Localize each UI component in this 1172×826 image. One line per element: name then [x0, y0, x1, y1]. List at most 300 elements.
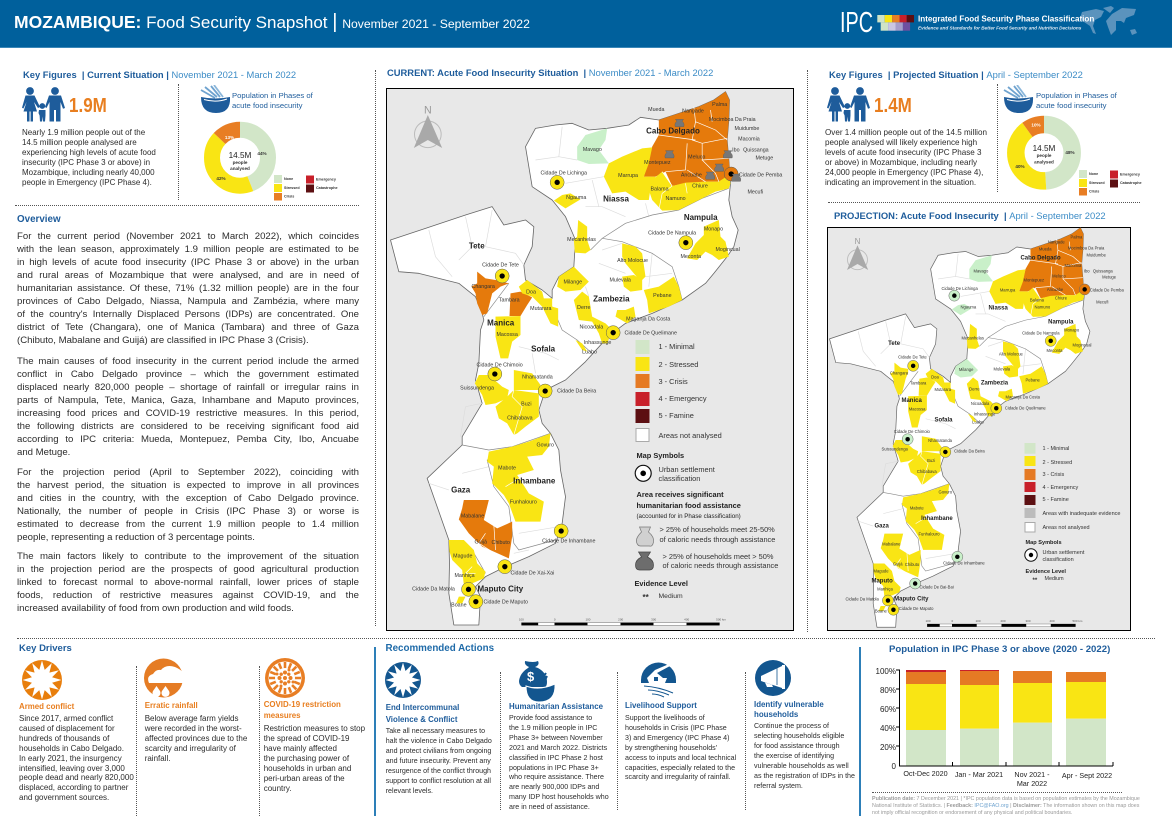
- country outline: [390, 92, 738, 625]
- overview text: the harvest period, the situation is expected to improve in all provinces: [17, 480, 359, 491]
- text block: Support the livelihoods of: [625, 714, 705, 722]
- map legend: Map Symbols: [1025, 540, 1061, 546]
- district labels: Cidade De Quelimane: [624, 331, 676, 337]
- icon: bowl: [1004, 85, 1034, 113]
- overview text: increased availability of food from own production and wild foods.: [17, 603, 294, 614]
- icon: humanitarian assistance: $: [527, 669, 535, 684]
- labels north: Nangade: [1047, 239, 1065, 244]
- bar: Apr-Sept 2022: [1066, 672, 1106, 766]
- overview text: conflict in Cabo Delgado province – which the government estimated: [17, 369, 359, 380]
- district labels: Cidade De Nampula: [648, 230, 696, 236]
- text block: intensified, leaving over 3,000: [19, 764, 125, 773]
- province lines: [883, 300, 1082, 571]
- title: MOZAMBIQUE: Food Security Snapshot | November 2021 - September 2022: [14, 11, 530, 33]
- scale bar: 100: [518, 618, 524, 622]
- labels north: Changara: [889, 370, 908, 375]
- text block: who require assistance. There: [509, 773, 604, 781]
- district lines: [858, 254, 1040, 559]
- district labels: Manhiça: [454, 573, 474, 579]
- labels south: Cidade De Chimoio: [893, 429, 930, 434]
- north arrow: [846, 237, 868, 270]
- province labels: Gaza: [451, 486, 470, 495]
- text block: Below average farm yields: [145, 714, 239, 723]
- donut chart: 44%: [257, 151, 267, 156]
- map legend: [1024, 443, 1120, 584]
- overview text: district of Tete (Changara), one of Manica (Tambara) and three of Gaza: [17, 322, 359, 333]
- district labels: Cidade De Maputo: [483, 599, 527, 605]
- phase 1 area: [577, 128, 608, 164]
- scale bar: 100: [975, 619, 980, 623]
- footer note: Publication date: 7 December 2021 | *IPC population data is based on population estimates by the Mozambique: [872, 796, 1140, 802]
- north arrow: N: [854, 237, 860, 246]
- map legend: humanitarian food assistance: [636, 501, 740, 510]
- chart heading: Population in IPC Phase 3 or above (2020 - 2022): [889, 644, 1110, 655]
- map legend: Medium: [658, 593, 683, 600]
- labels north: Doa: [931, 374, 939, 379]
- text block: Nearly 1.9 million people out of the: [22, 128, 145, 137]
- text block: people in Emergency (IPC Phase 4).: [22, 178, 152, 187]
- labels north: Derre: [969, 386, 980, 391]
- scale bar: 0: [553, 618, 555, 622]
- labels south: Maputo City: [894, 597, 929, 603]
- labels north: Cidade De Tete: [898, 355, 927, 360]
- labels south: Buzi: [927, 458, 935, 463]
- footer note: National Institute of Statistics. | Feedback: IPC@FAO.org | Disclaimer: The information shown on this map does: [872, 803, 1139, 809]
- text block: capacities, especially related to the: [625, 764, 735, 772]
- text block: classified in IPC Phase 2 host: [509, 754, 603, 762]
- sub heading: Population in Phases of: [232, 91, 313, 100]
- bar: Oct-Dec 2020: [906, 670, 946, 766]
- y axis labels: 0: [892, 762, 897, 771]
- province labels: Inhambane: [513, 476, 555, 485]
- text block: [22, 128, 156, 187]
- phase 2 areas: [873, 269, 1084, 611]
- text block: [754, 722, 855, 792]
- donut legend: [1079, 170, 1142, 196]
- labels south: Cidade Da Matola: [845, 597, 879, 602]
- footer note: [872, 796, 1140, 817]
- labels south: Inhambane: [921, 516, 953, 522]
- text block: Over 1.4 million people out of the 14.5 million: [825, 128, 987, 137]
- donut legend: Crisis: [1089, 190, 1099, 194]
- white district lines in coloured areas: [465, 107, 728, 573]
- map legend: Areas with inadequate evidence: [1042, 511, 1120, 517]
- title: households: [754, 710, 798, 719]
- map legend: Evidence Level: [634, 579, 687, 588]
- map legend: Evidence Level: [1025, 569, 1066, 575]
- text block: many IDP host households who: [509, 793, 609, 801]
- bar: Jan-Mar 2021: [960, 670, 999, 766]
- district labels: Ngauma: [566, 195, 586, 201]
- text block: [19, 714, 134, 802]
- labels north: Montepuez: [1023, 278, 1044, 283]
- text block: have mainly affected: [264, 744, 337, 753]
- district labels: Mutarara: [530, 306, 551, 312]
- overview text: provinces of Cabo Delgado, Niassa, Nampula and Zambézia, where many: [17, 296, 359, 307]
- title: [754, 700, 824, 720]
- bar chart: [860, 662, 1130, 792]
- text block: 14.5 million people analysed are: [22, 138, 137, 147]
- district labels: Macomia: [738, 137, 759, 143]
- heading: Key Figures | Current Situation | November 2021 - March 2022: [23, 69, 296, 80]
- overview text: Nationally, the number of people in Crisis (IPC Phase 3) or worse is: [17, 506, 359, 517]
- labels south: Suissundenga: [881, 446, 908, 451]
- map: projection: [827, 227, 1131, 631]
- donut chart: 13%: [225, 135, 234, 140]
- text block: vulnerable households as well: [754, 762, 849, 770]
- overview text: and rural areas of Mozambique that were analysed, and are in need of: [17, 270, 359, 281]
- donut chart: people: [1037, 153, 1052, 158]
- labels north: Niassa: [988, 305, 1008, 311]
- labels north: Muidumbe: [1086, 252, 1106, 257]
- text block: halt the violence in Cabo Delgado: [386, 737, 492, 745]
- icon: covid-19: [265, 658, 305, 698]
- y axis labels: 40%: [880, 724, 896, 733]
- map legend: of caloric needs through assistance: [662, 561, 778, 570]
- heading: Key Figures | Projected Situation | April - September 2022: [829, 69, 1083, 80]
- phase 3 areas: [458, 92, 730, 558]
- labels south: Chibabava: [916, 469, 937, 474]
- overview text: For the current period (November 2021 to March 2022), which coincides: [17, 231, 359, 242]
- map legend: Areas not analysed: [658, 431, 721, 440]
- text block: Mozambique, including nearly 40,000: [22, 168, 155, 177]
- text block: [144, 714, 247, 763]
- text block: caused of displacement for: [19, 724, 115, 733]
- title: COVID-19 restriction: [264, 700, 341, 709]
- province labels: Niassa: [603, 194, 629, 203]
- labels south: Manhiça: [877, 587, 893, 592]
- district labels: Mavago: [582, 147, 601, 153]
- map legend: Medium: [1044, 576, 1064, 582]
- map legend: **: [642, 593, 649, 602]
- labels north: Milange: [958, 367, 974, 372]
- text block: support to conflict resolution at all: [386, 777, 491, 785]
- labels north: Nampula: [1048, 319, 1074, 325]
- province labels: Tete: [468, 242, 485, 251]
- labels north: Luabo: [972, 419, 984, 424]
- overview text: in high levels of acute food insecurity (IPC Phase 3 or above) in the urban: [17, 257, 359, 268]
- map legend: 3 - Crisis: [1042, 472, 1064, 478]
- labels north: Cidade De Nampula: [1022, 330, 1060, 335]
- sub heading: [232, 91, 313, 110]
- labels south: [845, 429, 985, 613]
- district labels: Funhalouro: [509, 499, 536, 505]
- district labels: Mabote: [498, 465, 515, 471]
- donut legend: Catastrophe: [316, 186, 338, 190]
- text block: country.: [264, 784, 292, 793]
- donut legend: Crisis: [284, 194, 294, 198]
- district labels: Doa: [526, 289, 535, 295]
- labels north: Marrupa: [999, 288, 1015, 293]
- labels north: Mogincual: [1072, 343, 1091, 348]
- text block: selecting households eligible: [754, 732, 844, 740]
- district labels: Mogincual: [715, 247, 739, 253]
- axes: [896, 670, 1113, 766]
- scale bar: 200: [1000, 619, 1005, 623]
- district labels: Marrupa: [618, 173, 638, 179]
- district labels: Cidade De Xai-Xai: [510, 571, 554, 577]
- x axis labels: [903, 769, 1112, 788]
- map legend: 5 - Famine: [1042, 497, 1068, 503]
- sub heading: acute food insecurity: [232, 101, 303, 110]
- icon: conflict: [385, 662, 421, 698]
- text block: peri-urban areas of the: [264, 774, 345, 783]
- labels north: Quissanga: [1092, 268, 1113, 273]
- labels north: Pebane: [1025, 377, 1040, 382]
- text block: the exercise of identifying: [754, 752, 834, 760]
- map: current situation: [386, 88, 794, 631]
- text block: experiencing high levels of acute food: [22, 148, 156, 157]
- map legend: **: [1032, 578, 1037, 584]
- icon: livelihood support: [641, 662, 676, 698]
- text block: are in need of assistance.: [509, 803, 590, 811]
- district labels: Changara: [471, 284, 494, 290]
- scale bar: 400: [1049, 619, 1054, 623]
- district labels: Luabo: [582, 350, 597, 356]
- donut chart: 14.5M: [229, 151, 252, 160]
- province labels: Cabo Delgado: [646, 127, 699, 136]
- white district lines in coloured areas: [895, 239, 1082, 572]
- scale bar: 500 km: [1072, 619, 1082, 623]
- labels north: Cidade De Lichinga: [941, 286, 978, 291]
- district labels: Milange: [563, 279, 582, 285]
- overview text: humanitarian assistance. Of these, 71% (1.32 million people) are in the four: [17, 283, 359, 294]
- north arrow: N: [423, 104, 431, 116]
- district labels: Meconta: [680, 254, 700, 260]
- overview text: [17, 231, 360, 614]
- text block: resurgence of the conflict through: [386, 767, 491, 775]
- x axis labels: Oct-Dec 2020: [903, 769, 948, 778]
- district labels: Chibuto: [491, 540, 509, 546]
- overview text: (Chibuto, Mabalane and Guijá) are classified in IPC Phase 3 (Crisis).: [17, 335, 309, 346]
- text block: rainfall.: [145, 754, 170, 763]
- map legend: 4 - Emergency: [658, 394, 706, 403]
- labels north: [888, 235, 1124, 424]
- district labels: Mecufi: [747, 189, 763, 195]
- province labels: Maputo City: [477, 584, 523, 593]
- text block: [509, 714, 609, 811]
- district labels: Balama: [650, 187, 668, 193]
- text block: [825, 128, 987, 187]
- panel: recommended actions: [385, 643, 855, 811]
- donut legend: Emergency: [1120, 172, 1141, 176]
- text block: [264, 724, 365, 793]
- text block: 2021 and March 2022. Districts: [509, 744, 607, 752]
- labels north: Tete: [888, 341, 900, 347]
- labels north: Macomia: [1064, 263, 1082, 268]
- text block: the 1.9 million people in IPC: [509, 724, 597, 732]
- labels north: Cidade De Pemba: [1089, 287, 1124, 292]
- district labels: Inhassunge: [583, 340, 611, 346]
- district labels: Quissanga: [743, 147, 768, 153]
- text block: and government sources.: [19, 793, 109, 802]
- district labels: Mocimboa Da Praia: [708, 117, 755, 123]
- labels north: Mocimboa Da Praia: [1067, 246, 1105, 251]
- district labels: Ibo: [732, 147, 739, 153]
- district labels: Meluco: [688, 155, 705, 161]
- labels north: Chiure: [1054, 295, 1067, 300]
- icon: armed conflict: [22, 660, 62, 700]
- scale bar: 0: [951, 619, 953, 623]
- heading: current map: CURRENT: Acute Food Insecurity Situation | November 2021 - March 2022: [387, 67, 713, 78]
- district labels: Cidade De Inhambane: [542, 538, 595, 544]
- scale bar: [518, 618, 726, 625]
- title: Identify vulnerable: [754, 700, 824, 709]
- labels north: Inhassunge: [973, 411, 996, 416]
- IPC logo: Evidence and Standards for Better Food Security and Nutrition Decisions: [918, 26, 1082, 30]
- text block: Since 2017, armed conflict: [19, 714, 113, 723]
- district labels: Govuro: [536, 443, 554, 449]
- district labels: Palma: [712, 102, 727, 108]
- y axis labels: 80%: [880, 686, 896, 695]
- text block: or above) in Mozambique, including nearly: [825, 158, 977, 167]
- overview text: foods, reduction of restrictive measures against COVID-19, and the: [17, 590, 359, 601]
- labels north: Macossa: [908, 406, 926, 411]
- labels north: Meluco: [1052, 274, 1066, 279]
- labels south: Magude: [873, 568, 889, 573]
- x axis labels: Nov 2021 -: [1014, 770, 1050, 779]
- district labels: Magude: [453, 553, 472, 559]
- province lines: [448, 188, 728, 573]
- y axis labels: 60%: [880, 705, 896, 714]
- labels north: Mutarara: [934, 387, 951, 392]
- donut legend: None: [284, 177, 293, 181]
- district labels: Mulevala: [609, 278, 630, 284]
- map geography: [390, 92, 782, 625]
- province labels: Zambezia: [593, 294, 630, 303]
- icon: megaphone: [755, 660, 791, 696]
- text block: for food assistance through: [754, 742, 840, 750]
- sub heading: Population in Phases of: [1036, 91, 1117, 100]
- title: Erratic rainfall: [145, 700, 198, 710]
- overview text: of the country's Internally Displaced Persons (IDPs) are concentrated. One: [17, 309, 359, 320]
- text block: households in urban and: [264, 764, 351, 773]
- icon: humanitarian assistance: [519, 661, 554, 702]
- district labels: Mueda: [648, 107, 664, 113]
- district labels: Guijá: [474, 540, 486, 546]
- overview text: The main factors likely to contribute to the improvement of the situation: [17, 551, 359, 562]
- labels north: Mavago: [973, 268, 988, 273]
- overview heading: Overview: [17, 214, 61, 225]
- labels north: Metuge: [1102, 274, 1116, 279]
- text block: are nearly 900,000 IDPs and: [509, 783, 599, 791]
- labels south: Cidade De Bai-Bai: [919, 585, 953, 590]
- map legend: of caloric needs through assistance: [659, 535, 775, 544]
- district labels: Ancuabe: [680, 173, 701, 179]
- labels south: Gaza: [874, 523, 889, 529]
- map legend: 1 - Minimal: [658, 342, 694, 351]
- labels north: Cidade De Quelimane: [1004, 405, 1046, 410]
- title: Humanitarian Assistance: [509, 702, 603, 710]
- donut chart: analysed: [230, 166, 250, 171]
- stat: 1.9M: 1.9M: [69, 94, 107, 117]
- donut chart: [204, 122, 276, 194]
- map legend: 5 - Famine: [658, 411, 693, 420]
- district labels: Macossa: [496, 332, 517, 338]
- district labels: Maganja Da Costa: [626, 316, 670, 322]
- overview text: parts of Nampula, Tete, Manica, Gaza, Inhambane and Maputo provinces,: [17, 395, 359, 406]
- icon: family: [22, 87, 65, 122]
- overview text: increasing food prices and COVID-19 restrictive measures. In this period,: [17, 408, 359, 419]
- text block: displaced, according to partner: [19, 783, 128, 792]
- country outline: [829, 228, 1089, 627]
- district labels: Suissundenga: [460, 385, 493, 391]
- donut chart: 14.5M: [1033, 144, 1056, 153]
- title: Armed conflict: [19, 702, 74, 710]
- district labels: Mabalane: [460, 513, 484, 519]
- province labels: Nampula: [683, 213, 718, 222]
- title: measures: [264, 710, 301, 720]
- district labels: Cidade De Tete: [482, 263, 518, 269]
- text block: 24,000 people in Emergency (IPC Phase 4),: [825, 168, 983, 177]
- overview text: the following districts are considered to be receiving significant food aid: [17, 421, 359, 432]
- map legend: Map Symbols: [636, 451, 684, 460]
- map legend: classification: [658, 474, 700, 483]
- district labels: Pebane: [653, 293, 671, 299]
- map legend: classification: [1042, 557, 1073, 563]
- scale bar: 200: [618, 618, 623, 622]
- panel: key figures projected: [825, 69, 1142, 196]
- text block: insecurity (IPC Phase 3 or above) in: [22, 158, 150, 167]
- footer note: not imply official recognition or endorsement of any physical and political boundaries.: [872, 810, 1072, 816]
- district labels: Chiure: [692, 183, 707, 189]
- text block: Provide food assistance to: [509, 714, 592, 722]
- heading: Recommended Actions: [386, 643, 494, 654]
- text block: [386, 727, 492, 795]
- map legend: Urban settlement: [658, 465, 714, 474]
- labels south: Cidade De Maputo: [898, 606, 934, 611]
- sub heading: [1036, 91, 1117, 110]
- district labels: Nhamatanda: [522, 375, 552, 381]
- overview text: people, representing a reduction of 3 percentage points.: [17, 532, 255, 543]
- district labels: Cidade De Chimoio: [476, 363, 522, 369]
- text block: 3) and Emergency (IPC Phase 4): [625, 734, 729, 742]
- text block: relevant levels.: [386, 787, 433, 795]
- y axis labels: 20%: [880, 743, 896, 752]
- scale bar: 300: [651, 618, 656, 622]
- province labels: [451, 127, 718, 593]
- district labels: Cidade Da Matola: [412, 587, 454, 593]
- text block: In early 2021, the insurgency: [19, 754, 122, 763]
- labels south: Cidade De Inhambane: [943, 560, 985, 565]
- district labels: Nangade: [682, 108, 703, 114]
- district labels: Metuge: [755, 155, 773, 161]
- IPC logo: IPC: [840, 7, 873, 39]
- labels north: Palma: [1070, 235, 1082, 240]
- icon: family: [827, 87, 870, 122]
- donut legend: Stressed: [284, 186, 300, 190]
- text block: Take all necessary measures to: [386, 727, 485, 735]
- text block: affected provinces due to the: [145, 734, 247, 743]
- panel: key figures current: [22, 69, 338, 200]
- text block: and future insecurity. Prevent any: [386, 757, 491, 765]
- district labels: Buzi: [521, 401, 531, 407]
- labels south: Maputo: [871, 578, 893, 584]
- map legend: [634, 340, 778, 602]
- district labels: Chibabava: [507, 416, 532, 422]
- donut legend: Emergency: [316, 178, 337, 182]
- overview text: according to IPC criteria: Mueda, Montepuez, Pemba City, Ibo, Ancuabe: [17, 434, 359, 445]
- province labels: Manica: [487, 318, 514, 327]
- donut chart: analysed: [1034, 160, 1054, 164]
- phase 3 areas: [1019, 228, 1084, 298]
- province labels: Sofala: [531, 344, 555, 353]
- scale bar: 400: [684, 618, 689, 622]
- labels north: Monapo: [1064, 328, 1079, 333]
- district labels: [412, 102, 782, 609]
- text block: people dead and nearly 820,000: [19, 773, 134, 782]
- labels south: Boane: [874, 608, 887, 613]
